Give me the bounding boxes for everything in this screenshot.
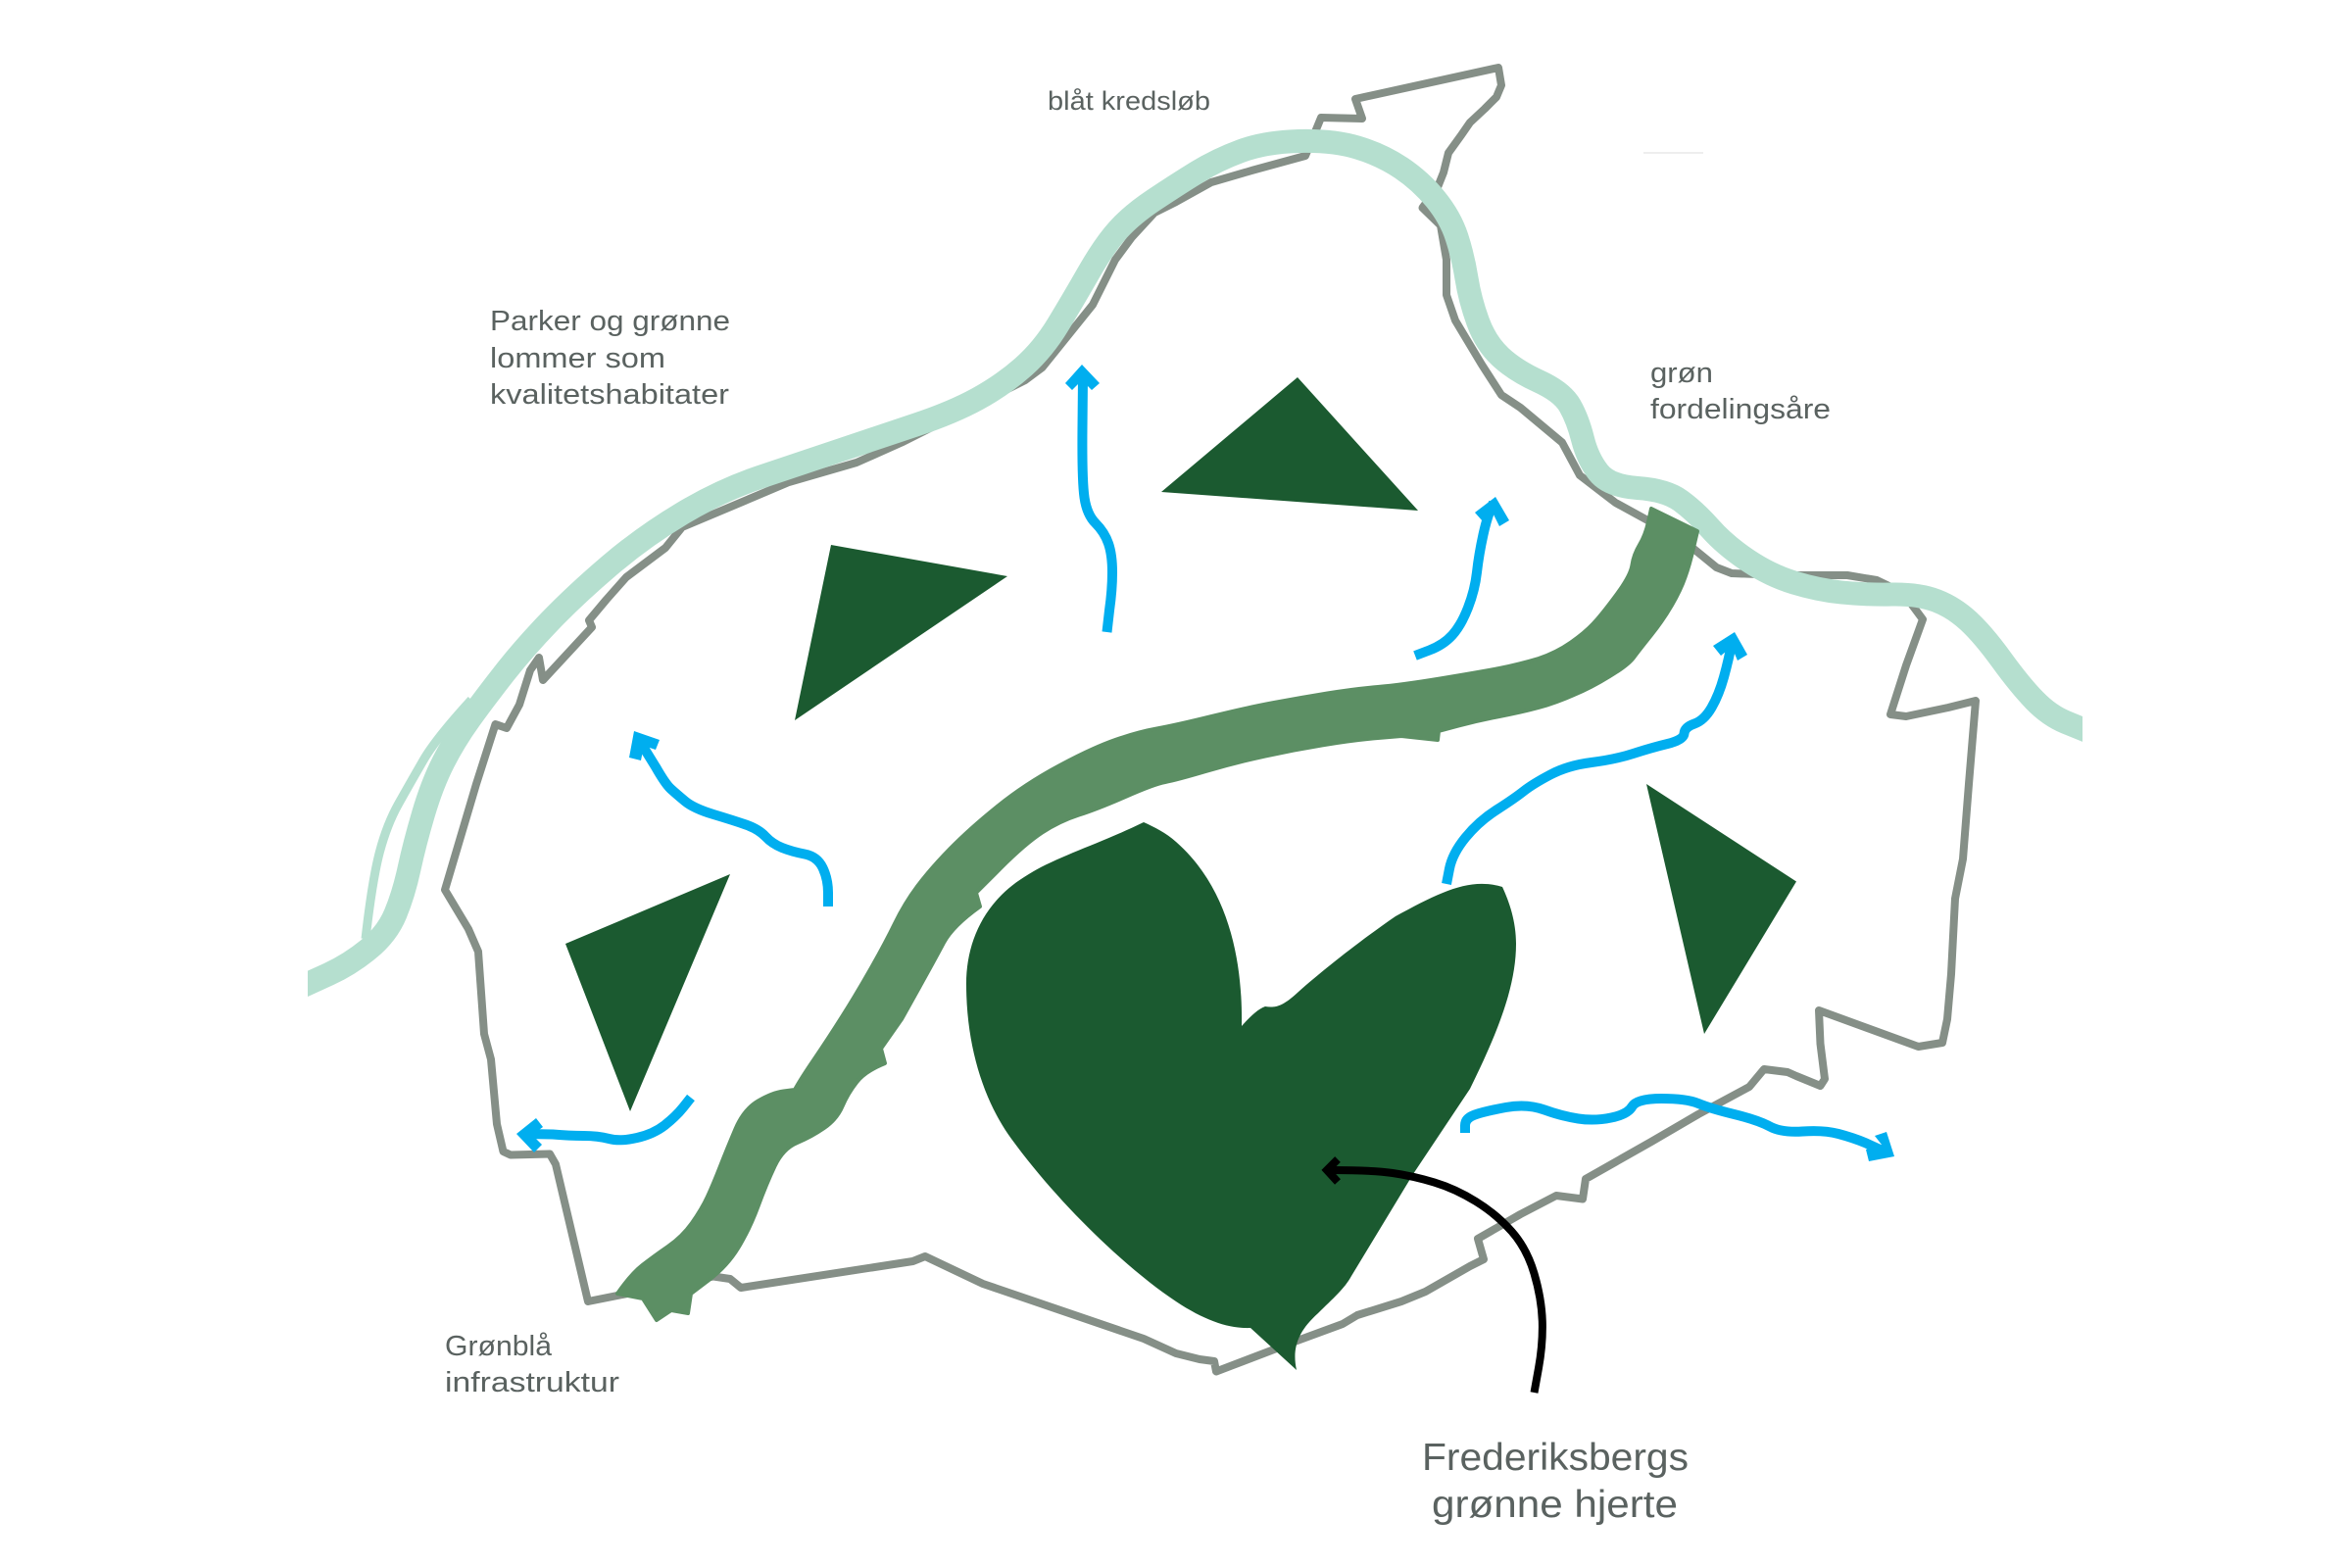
arrow: east long [1446,632,1747,884]
green heart [966,822,1516,1370]
black callout arrow to heart [1327,1159,1543,1393]
main pale river [290,141,2102,992]
label: grøn fordelingsåre: grøn [1650,358,1713,389]
blue circuit: pale green ring route [290,141,2102,992]
blue arrows [516,365,1894,1161]
label: blåt kredsløb: blåt kredsløb [1048,86,1210,116]
park: right [1646,784,1796,1034]
label: parks and green pockets [490,306,730,411]
label: Frederiksbergs grønne hjerte [1422,1437,1689,1526]
park: lower left [565,874,730,1111]
label: Grønblå infrastruktur: infrastruktur [445,1367,619,1398]
label: Frederiksbergs grønne hjerte: grønne hjerte [1432,1484,1678,1526]
label: grøn fordelingsåre: fordelingsåre [1650,394,1831,425]
park: top centre [1161,377,1418,511]
label: Grønblå infrastruktur: Grønblå [445,1331,553,1362]
label: parks and green pockets: Parker og grønne [490,306,730,337]
park triangles [565,377,1796,1111]
arrow: north west [629,731,828,906]
label: grøn fordelingsåre [1650,358,1831,425]
label: parks and green pockets: lommer som [490,343,665,374]
label: Grønblå infrastruktur [445,1331,619,1398]
arrow: south east [1465,1099,1894,1161]
label: Frederiksbergs grønne hjerte: Frederiksbergs [1422,1437,1689,1479]
arrow: west [516,1098,691,1152]
thin river branch [366,700,471,939]
label: parks and green pockets: kvalitetshabitater [490,379,729,411]
green distribution artery [617,509,1697,1320]
map diagram [308,64,2082,1525]
park: upper left [795,545,1007,720]
arrow: north centre [1065,365,1112,632]
arrow: north east [1415,497,1509,656]
municipal boundary outline [445,68,1976,1372]
